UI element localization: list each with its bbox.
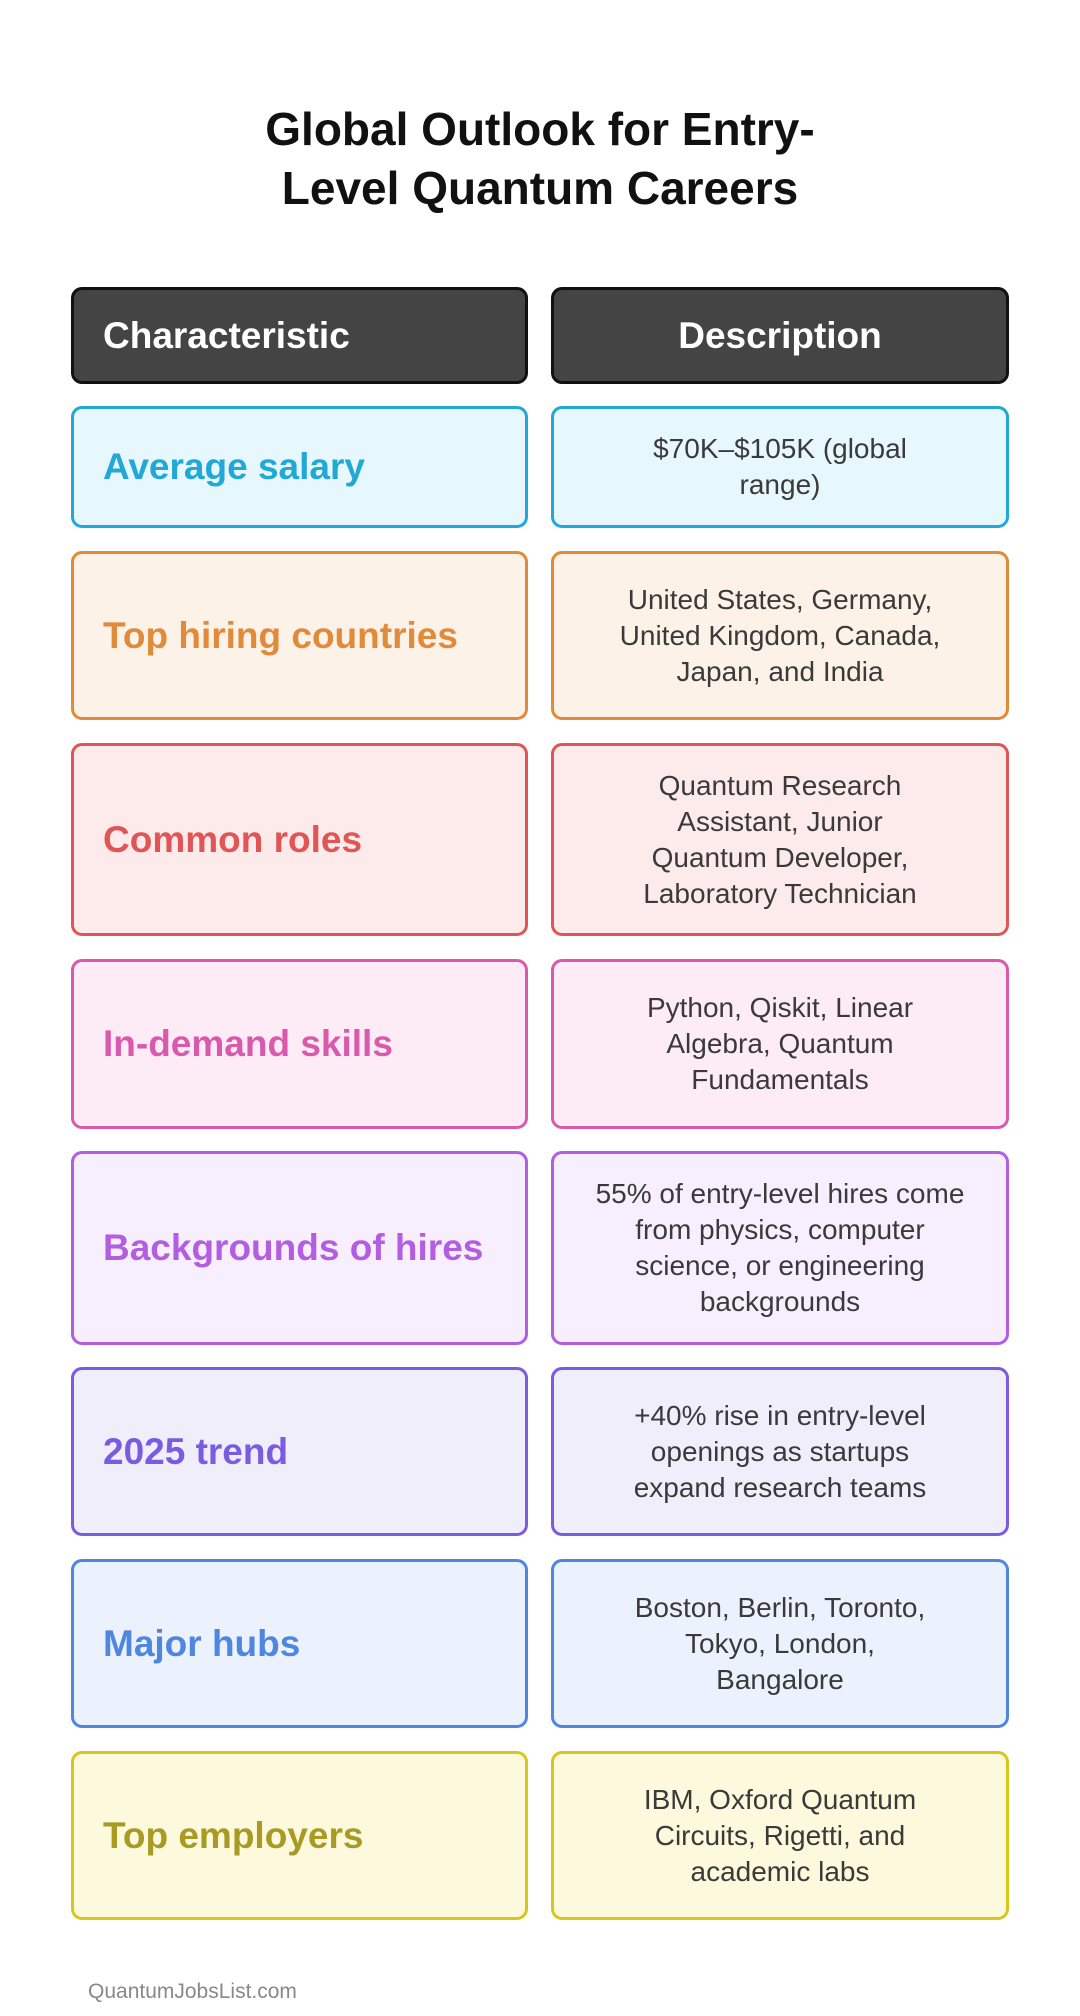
row 3 description bbox=[551, 743, 1009, 936]
row 8 description bbox=[551, 1751, 1009, 1920]
header: characteristic: Characteristic bbox=[103, 314, 350, 356]
title bbox=[265, 103, 815, 214]
row 8 label bbox=[71, 1751, 528, 1920]
row 5 description bbox=[551, 1151, 1009, 1345]
footer: QuantumJobsList.com bbox=[88, 1980, 297, 2003]
row 3 label bbox=[71, 743, 528, 936]
row 5 description: 55% of entry-level hires come from physics, computer science, or engineering backgrounds bbox=[596, 1178, 964, 1317]
row 4 description: Python, Qiskit, Linear Algebra, Quantum Fundamentals bbox=[647, 992, 913, 1095]
row 3 label: Common roles bbox=[103, 818, 362, 860]
row 7 label: Major hubs bbox=[103, 1622, 300, 1664]
row 1 description bbox=[551, 406, 1009, 528]
row 2 description: United States, Germany, United Kingdom, Canada, Japan, and India bbox=[620, 584, 940, 686]
row 3 description: Quantum Research Assistant, Junior Quantum Developer, Laboratory Technician bbox=[643, 770, 917, 908]
title: Global Outlook for Entry- bbox=[265, 103, 815, 155]
row 1 label bbox=[71, 406, 528, 528]
row 4 label: In-demand skills bbox=[103, 1023, 393, 1064]
row 6 description: +40% rise in entry-level openings as startups expand research teams bbox=[634, 1400, 926, 1502]
row 7 label bbox=[71, 1559, 528, 1728]
row 7 description bbox=[551, 1559, 1009, 1728]
row 8 description: IBM, Oxford Quantum Circuits, Rigetti, and academic labs bbox=[644, 1784, 916, 1886]
row 6 label bbox=[71, 1367, 528, 1536]
row 4 label bbox=[71, 959, 528, 1129]
header: characteristic bbox=[71, 287, 528, 384]
header: description bbox=[551, 287, 1009, 384]
row 6 description bbox=[551, 1367, 1009, 1536]
row 2 description bbox=[551, 551, 1009, 720]
row 1 label: Average salary bbox=[103, 446, 365, 487]
title: Level Quantum Careers bbox=[282, 162, 798, 214]
row 4 description bbox=[551, 959, 1009, 1129]
row 2 label bbox=[71, 551, 528, 720]
row 5 label bbox=[71, 1151, 528, 1345]
row 5 label: Backgrounds of hires bbox=[103, 1227, 483, 1268]
row 8 label: Top employers bbox=[103, 1814, 363, 1856]
row 2 label: Top hiring countries bbox=[103, 614, 458, 656]
header: description: Description bbox=[678, 314, 882, 356]
row 1 description: $70K–$105K (global range) bbox=[653, 433, 907, 500]
row 6 label: 2025 trend bbox=[103, 1430, 288, 1472]
row 7 description: Boston, Berlin, Toronto, Tokyo, London, Bangalore bbox=[635, 1592, 925, 1694]
